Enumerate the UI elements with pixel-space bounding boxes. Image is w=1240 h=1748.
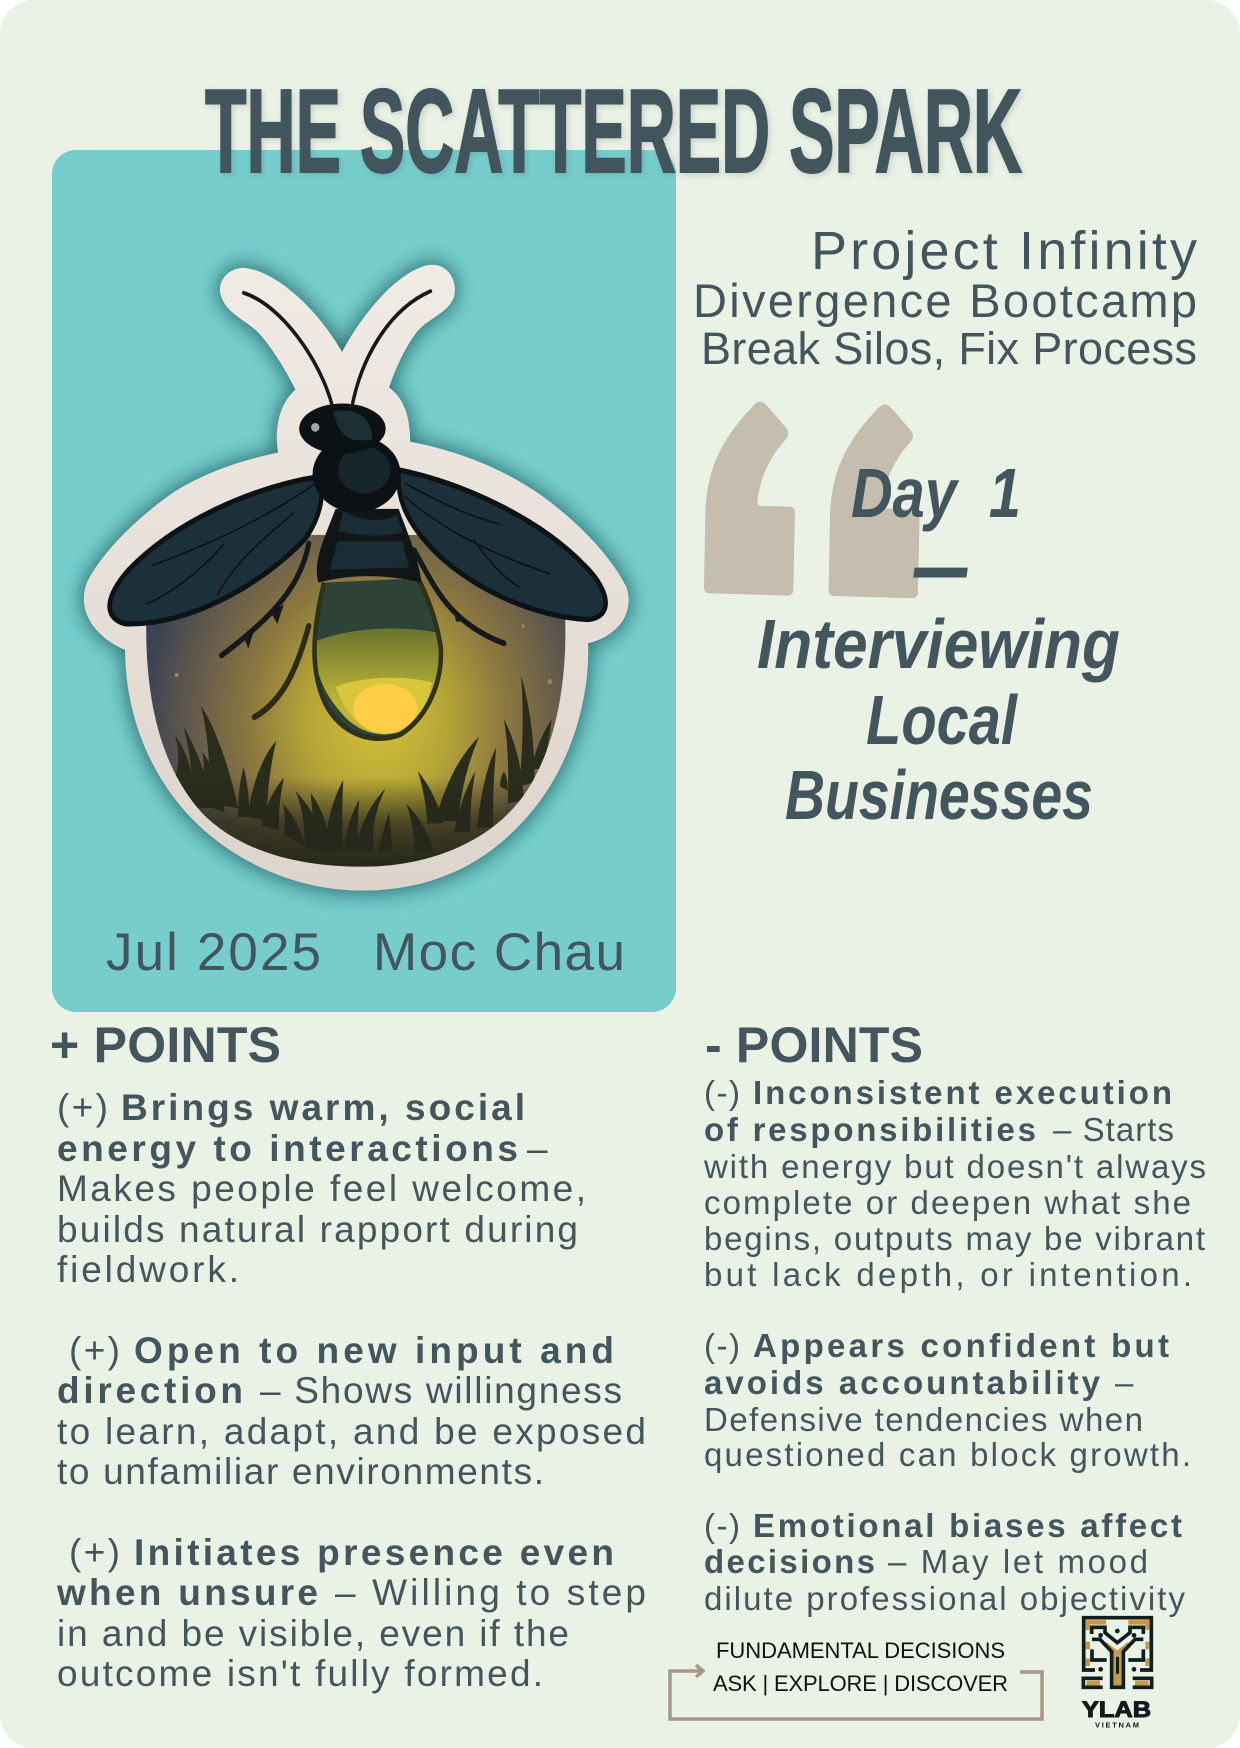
icon: firefly sticker — [84, 265, 629, 891]
text block: emotional biases: dilute professional objectivity — [704, 1580, 1186, 1617]
text block: warm social energy: builds natural rapport during — [57, 1209, 578, 1250]
text block: emotional biases: – May let mood — [888, 1543, 1148, 1580]
heading: day one topic: Interviewing — [757, 605, 1120, 683]
text block: inconsistent execution: begins, outputs may be vibrant — [704, 1220, 1205, 1257]
text block: warm social energy: (+) — [57, 1087, 108, 1128]
caption: date and place — [106, 923, 625, 982]
text block: avoids accountability: questioned can block growth. — [704, 1436, 1191, 1473]
caption: date and place: Moc Chau — [373, 923, 625, 982]
text block: avoids accountability: (-) — [704, 1327, 740, 1364]
text block: inconsistent execution — [703, 1074, 1206, 1293]
heading: day one topic: — — [914, 528, 967, 606]
heading: project subtitle: Divergence Bootcamp — [693, 274, 1197, 327]
text block: fundamental decisions: FUNDAMENTAL DECISIONS — [716, 1638, 1005, 1663]
icon: YLAB logo: VIETNAM — [1095, 1720, 1139, 1730]
panel: negative points — [703, 1017, 1206, 1617]
text block: open to new input: Open to new input and — [134, 1330, 614, 1371]
text block: warm social energy: Makes people feel welcome, — [57, 1168, 586, 1209]
text block: warm social energy: energy to interactions — [57, 1128, 518, 1169]
arrow: looping frame — [670, 1665, 1042, 1719]
panel: teal illustration card — [52, 150, 676, 1012]
text block: inconsistent execution: but lack depth, or intention. — [704, 1256, 1192, 1293]
icon: quotation marks — [704, 402, 920, 598]
text block: emotional biases: decisions — [704, 1543, 875, 1580]
text block: inconsistent execution: – Starts — [1053, 1111, 1174, 1148]
panel: positive points — [50, 1017, 646, 1694]
text block: avoids accountability — [704, 1327, 1191, 1473]
text block: initiates presence — [56, 1532, 646, 1694]
heading: day one topic: Day 1 — [851, 454, 1021, 532]
text block: avoids accountability: – — [1115, 1364, 1134, 1401]
caption: date and place: Jul 2025 — [106, 923, 321, 982]
heading: day one topic: Businesses — [785, 756, 1093, 834]
text block: open to new input: – Shows willingness — [260, 1370, 622, 1411]
text block: avoids accountability: Defensive tendencies when — [704, 1401, 1143, 1438]
text block: initiates presence: outcome isn't fully formed. — [57, 1653, 543, 1694]
text block: open to new input: to unfamiliar environments. — [57, 1451, 544, 1492]
text block: inconsistent execution: (-) — [704, 1074, 740, 1111]
text block: inconsistent execution: of responsibilities — [704, 1111, 1036, 1148]
text block: initiates presence: (+) — [69, 1532, 120, 1573]
text block: initiates presence: in and be visible, even if the — [57, 1613, 569, 1654]
heading: project subtitle: Break Silos, Fix Process — [701, 323, 1197, 374]
icon: YLAB logo — [1082, 1618, 1152, 1730]
text block: initiates presence: – Willing to step — [335, 1572, 646, 1613]
text block: inconsistent execution: complete or deepen what she — [704, 1184, 1191, 1221]
text block: emotional biases: (-) — [704, 1507, 740, 1544]
heading: day one topic: Local — [866, 681, 1018, 759]
text block: avoids accountability: avoids accountability — [704, 1364, 1101, 1401]
text block: inconsistent execution: with energy but doesn't always — [703, 1148, 1206, 1185]
heading: day one topic — [757, 454, 1120, 834]
heading: plus points: + POINTS — [50, 1017, 281, 1073]
text block: open to new input: to learn, adapt, and be exposed — [57, 1411, 646, 1452]
text block: initiates presence: Initiates presence even — [134, 1532, 614, 1573]
text block: avoids accountability: Appears confident but — [753, 1327, 1169, 1364]
text block: open to new input: direction — [57, 1370, 243, 1411]
text block: open to new input — [57, 1330, 646, 1492]
icon: YLAB logo: YLAB — [1082, 1697, 1151, 1722]
text block: warm social energy — [57, 1087, 586, 1290]
text block: emotional biases: Emotional biases affect — [753, 1507, 1182, 1544]
heading: minus points: - POINTS — [705, 1017, 923, 1073]
text block: emotional biases — [704, 1507, 1186, 1617]
text block: open to new input: (+) — [69, 1330, 120, 1371]
text block: warm social energy: Brings warm, social — [121, 1087, 525, 1128]
text block: initiates presence: when unsure — [56, 1572, 318, 1613]
text block: fundamental decisions: ASK | EXPLORE | DISCOVER — [713, 1671, 1008, 1696]
heading: project subtitle — [693, 221, 1197, 374]
text block: fundamental decisions — [713, 1638, 1008, 1696]
text block: warm social energy: – — [527, 1128, 548, 1169]
heading: project subtitle: Project Infinity — [811, 221, 1197, 281]
text block: warm social energy: fieldwork. — [57, 1249, 239, 1290]
text block: inconsistent execution: Inconsistent execution — [753, 1074, 1172, 1111]
